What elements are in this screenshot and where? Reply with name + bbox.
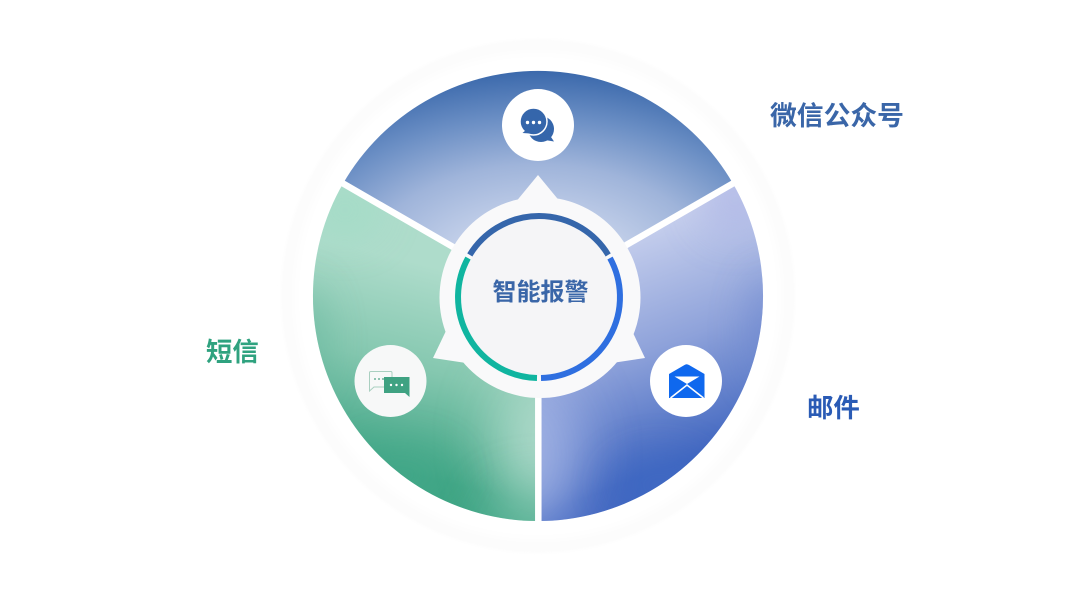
label: WeChat: 微信公众号 xyxy=(770,101,904,131)
label: Email: 邮件 xyxy=(807,393,860,423)
panel: email sector xyxy=(542,186,764,521)
center disc xyxy=(461,219,617,375)
panel: SMS sector xyxy=(312,186,536,521)
panel: WeChat sector xyxy=(344,70,732,244)
label: SMS: 短信 xyxy=(206,337,259,367)
outer halo xyxy=(281,39,795,553)
icon: WeChat bubbles xyxy=(502,89,574,161)
icon: SMS bubbles xyxy=(354,345,426,417)
icon: envelope xyxy=(650,345,722,417)
progress ring xyxy=(458,216,620,378)
central hub shape xyxy=(433,175,645,398)
center title: 智能报警 xyxy=(492,279,588,306)
sector dividers xyxy=(340,182,736,526)
infographic: smart alarm channels xyxy=(206,70,902,521)
